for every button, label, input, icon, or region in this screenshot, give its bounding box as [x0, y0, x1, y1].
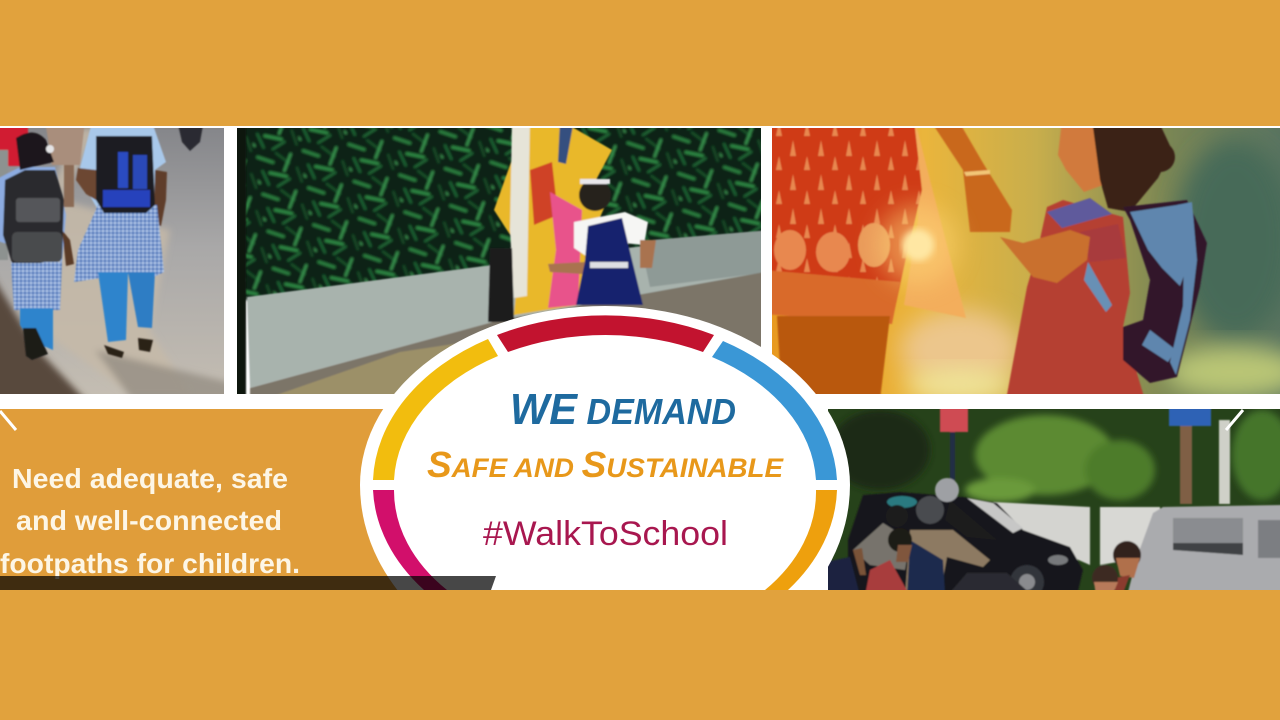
central oval badge	[360, 306, 850, 590]
ring segment: orange	[765, 490, 837, 590]
woman	[494, 120, 612, 315]
riders and children	[945, 500, 997, 540]
message text: footpaths for children.	[0, 548, 300, 579]
child	[1006, 200, 1145, 400]
white oval	[360, 306, 850, 590]
message text	[0, 463, 300, 579]
girl	[579, 179, 611, 211]
ring segment: red	[497, 315, 714, 352]
photo: two schoolgirls walking on a road	[0, 128, 224, 394]
message text: and well-connected	[16, 505, 282, 536]
photo: mother and child holding hands at sunset	[765, 120, 1280, 401]
mother	[904, 120, 966, 318]
message text: Need adequate, safe	[12, 463, 288, 494]
dark strip at panel base	[0, 576, 496, 590]
heading: We demand: WE DEMAND	[510, 385, 736, 434]
hashtag: WalkToSchool: #WalkToSchool	[483, 515, 728, 553]
ring segment: magenta	[373, 490, 447, 590]
infographic canvas	[0, 126, 1280, 590]
ring segment: blue	[712, 341, 837, 480]
white collage band	[0, 126, 1280, 590]
backpack	[1123, 200, 1207, 383]
panel: message box	[0, 409, 400, 590]
icon: left chevron tick	[0, 411, 16, 430]
black car	[848, 492, 1083, 596]
photo: woman and daughter beside a hedge	[230, 120, 770, 400]
heading: Safe and Sustainable: SAFE AND SUSTAINABLE	[427, 444, 784, 485]
icon: right chevron tick	[1226, 410, 1243, 430]
right girl	[78, 122, 166, 210]
ring segment: yellow	[373, 339, 498, 480]
left girl	[0, 167, 66, 262]
photo: street traffic with schoolchildren	[820, 405, 1280, 599]
silver car	[1127, 505, 1280, 596]
